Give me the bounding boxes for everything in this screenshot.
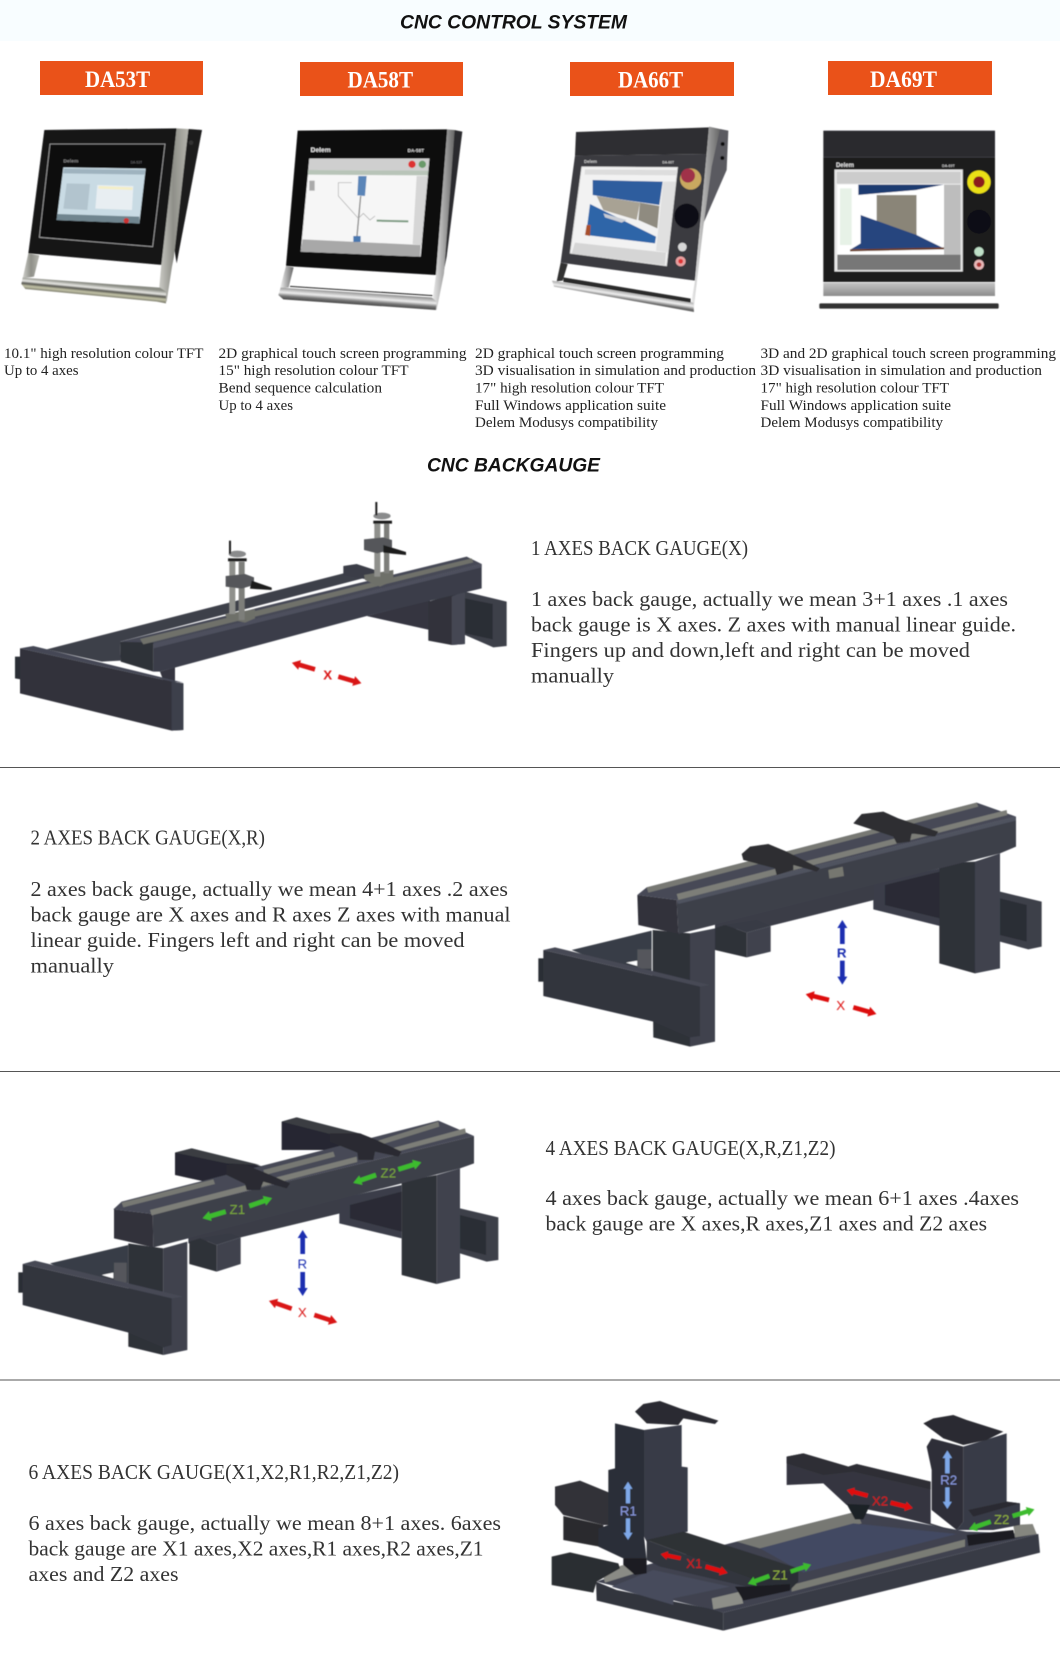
X axis arrows (805, 989, 878, 1019)
Z1 axis arrows (201, 1193, 274, 1223)
control specs: DA58T: 15" high resolution colour TFT (218, 363, 409, 379)
control specs: DA53T: Up to 4 axes (4, 363, 79, 379)
description: 2 axes back gauge (30, 877, 511, 978)
label: DA69T: DA69T (870, 67, 937, 92)
control panel: DA69T: DA-69T (942, 164, 956, 168)
control panel: DA66T: Delem (584, 159, 597, 164)
top header band with title: CNC CONTROL SYSTEM (400, 12, 628, 34)
control panel: DA66T: DA-66T (662, 160, 674, 164)
control specs: DA69T: 17" high resolution colour TFT (760, 380, 949, 396)
control panel: DA69T: Delem (836, 163, 854, 169)
X axis arrows (291, 658, 363, 688)
illustration: 1 axis back gauge (15, 502, 507, 731)
control specs: DA66T: 17" high resolution colour TFT (475, 380, 664, 396)
R axis arrows (298, 1230, 308, 1296)
label: DA58T (300, 62, 463, 96)
R axis arrows: R (298, 1257, 307, 1272)
heading: CNC BACKGAUGE: CNC BACKGAUGE (427, 456, 601, 476)
finger block left (227, 1164, 290, 1190)
right column (927, 1433, 1020, 1546)
description: 1 axes back gauge (531, 587, 1016, 688)
X axis arrows: X (298, 1305, 307, 1320)
illustration: 6 axes back gauge (552, 1401, 1040, 1631)
description: 1 axes back gauge: manually (531, 664, 615, 688)
finger block right (853, 812, 938, 843)
Z2 axis arrows (352, 1158, 423, 1188)
finger block left (742, 844, 820, 875)
X axis arrows (267, 1296, 339, 1327)
control panel: DA53T: Delem (63, 159, 79, 165)
description: 6 axes back gauge (28, 1511, 501, 1586)
control panel: DA53T (21, 128, 202, 303)
control specs: DA66T: 2D graphical touch screen programming (475, 346, 724, 362)
Z1 axis arrows: Z1 (230, 1202, 245, 1217)
illustration: 2 axes back gauge (538, 803, 1042, 1047)
description: 2 axes back gauge: manually (30, 954, 115, 978)
description: 1 axes back gauge: Fingers up and down,left and right can be moved (531, 638, 971, 662)
control panel: DA58T: DA-58T (408, 148, 424, 153)
control specs: DA58T: Up to 4 axes (218, 398, 293, 414)
R2 axis arrows (940, 1451, 957, 1509)
left finger (635, 1401, 718, 1425)
R1 axis arrows (620, 1482, 637, 1540)
X2 axis arrows (846, 1486, 914, 1513)
left column (598, 1423, 688, 1575)
description: 1 axes back gauge: 1 axes back gauge, actually we mean 3+1 axes .1 axes (531, 587, 1008, 611)
control specs: DA66T: 3D visualisation in simulation and production (475, 363, 757, 379)
control specs: DA53T: 10.1" high resolution colour TFT (4, 346, 204, 362)
X1 axis arrows (660, 1550, 729, 1578)
description: 4 axes back gauge: 4 axes back gauge, actually we mean 6+1 axes .4axes (546, 1186, 1019, 1210)
heading: 4 axes back gauge: 4 AXES BACK GAUGE(X,R,Z1,Z2) (546, 1136, 836, 1160)
X axis arrows: X (836, 998, 845, 1013)
X axis arrows: X (323, 667, 332, 682)
control specs: DA69T: Delem Modusys compatibility (760, 415, 944, 431)
control specs: DA69T (760, 346, 1056, 431)
R2 axis arrows: R2 (940, 1472, 957, 1487)
control specs: DA69T: 3D and 2D graphical touch screen programming (760, 346, 1056, 362)
control specs: DA53T (4, 346, 204, 379)
control specs: DA66T: Delem Modusys compatibility (475, 415, 659, 431)
control specs: DA66T (475, 346, 757, 431)
heading: 2 axes back gauge: 2 AXES BACK GAUGE(X,R) (30, 826, 265, 850)
control panel: DA69T (819, 131, 999, 309)
Z2 axis arrows (968, 1505, 1036, 1534)
X2 axis arrows: X2 (872, 1493, 888, 1508)
heading: 6 axes back gauge: 6 AXES BACK GAUGE(X1,X2,R1,R2,Z1,Z2) (28, 1460, 399, 1484)
description: 2 axes back gauge: 2 axes back gauge, actually we mean 4+1 axes .2 axes (30, 877, 508, 901)
finger stop right (364, 502, 406, 587)
Z1 axis arrows (746, 1560, 813, 1588)
R axis arrows (837, 920, 847, 985)
description: 1 axes back gauge: back gauge is X axes. Z axes with manual linear guide. (531, 612, 1016, 636)
control specs: DA69T: Full Windows application suite (760, 398, 951, 414)
control specs: DA58T: Bend sequence calculation (218, 380, 383, 396)
control specs: DA66T: Full Windows application suite (475, 398, 666, 414)
control specs: DA58T: 2D graphical touch screen programming (218, 346, 466, 362)
description: 4 axes back gauge: back gauge are X axes,R axes,Z1 axes and Z2 axes (546, 1212, 987, 1236)
control panel: DA66T (552, 127, 728, 312)
illustration: 4 axes back gauge (18, 1117, 498, 1355)
control panel: DA53T: DA-53T (131, 161, 142, 165)
heading: 1 axes back gauge: 1 AXES BACK GAUGE(X) (531, 536, 748, 560)
label: DA58T: DA58T (348, 68, 413, 92)
finger stop left (225, 541, 272, 623)
control specs: DA58T (218, 346, 466, 414)
label: DA69T (828, 61, 992, 95)
control panel: DA58T: Delem (311, 147, 331, 154)
top header band with title (0, 0, 1060, 41)
finger block right (330, 1133, 402, 1160)
label: DA53T: DA53T (85, 67, 150, 92)
control specs: DA69T: 3D visualisation in simulation and production (760, 363, 1043, 379)
R axis arrows: R (837, 946, 847, 961)
label: DA53T (40, 61, 203, 95)
Z2 axis arrows: Z2 (994, 1512, 1009, 1527)
label: DA66T: DA66T (618, 68, 683, 92)
description: 4 axes back gauge (546, 1186, 1019, 1236)
description: 6 axes back gauge: axes and Z2 axes (28, 1562, 178, 1586)
description: 6 axes back gauge: 6 axes back gauge, actually we mean 8+1 axes. 6axes (28, 1511, 501, 1535)
Z1 axis arrows: Z1 (772, 1567, 788, 1582)
description: 6 axes back gauge: back gauge are X1 axes,X2 axes,R1 axes,R2 axes,Z1 (28, 1536, 484, 1560)
description: 2 axes back gauge: back gauge are X axes and R axes Z axes with manual (30, 902, 511, 926)
X1 axis arrows: X1 (686, 1556, 702, 1571)
Z2 axis arrows: Z2 (381, 1165, 396, 1180)
control panel: DA58T (278, 129, 462, 310)
description: 2 axes back gauge: linear guide. Fingers left and right can be moved (30, 928, 465, 952)
R1 axis arrows: R1 (620, 1503, 637, 1518)
label: DA66T (570, 62, 734, 96)
X1 beam (647, 1532, 798, 1601)
right finger (923, 1415, 1003, 1445)
